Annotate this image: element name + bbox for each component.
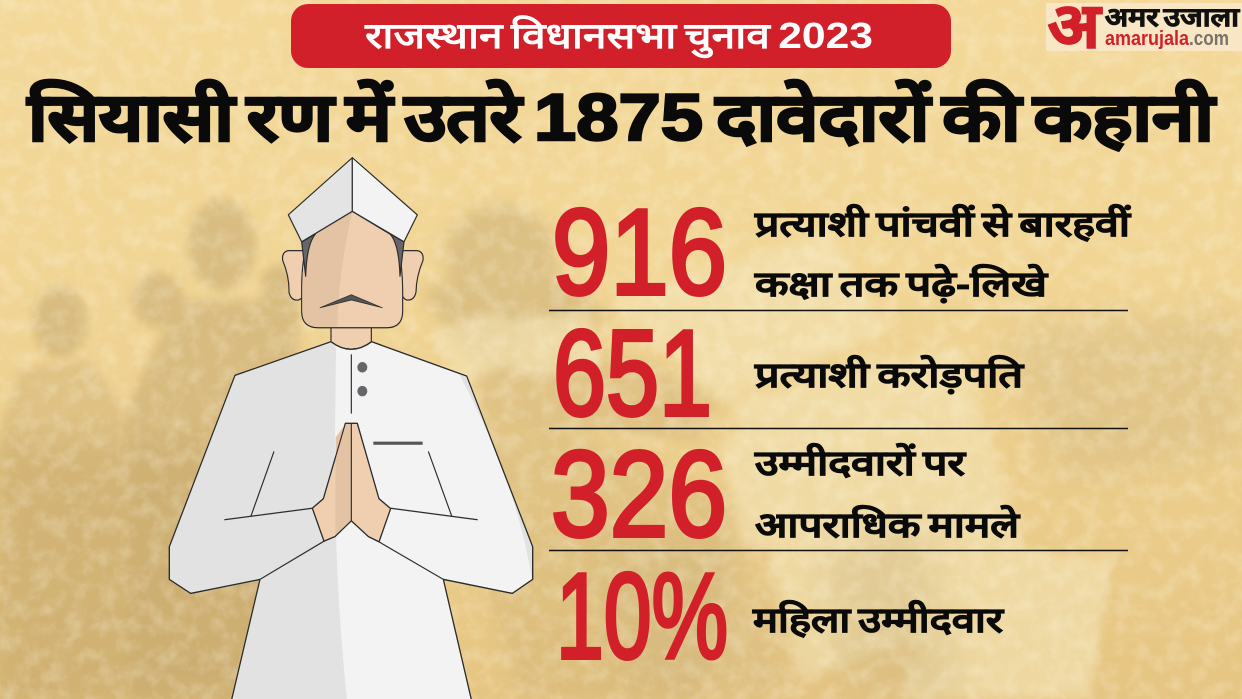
logo: Amar Ujala: amarujala: [1105, 28, 1190, 50]
illustration: politician in namaste pose: [169, 158, 533, 699]
hair: [302, 234, 404, 276]
hands: [312, 423, 391, 542]
ears: [283, 251, 423, 300]
crowd silhouettes, centre: [420, 205, 740, 699]
main heading: सियासी रण में उतरे 1875 दावेदारों की कहानी: [26, 79, 1217, 154]
stat: 10%: 10%: [556, 548, 728, 684]
stat: 10%: महिला उम्मीदवार: [752, 600, 1005, 640]
logo: Amar Ujala: .com: [1189, 28, 1229, 50]
crowd silhouettes, left: [0, 199, 300, 699]
stat: 326: 326: [551, 426, 727, 562]
stat: 10%: [556, 548, 1005, 684]
stat: 651: 651: [553, 305, 712, 441]
stat: 916: प्रत्याशी पांचवीं से बारहवीं: [754, 204, 1132, 244]
cap: [288, 158, 417, 242]
stat: 326: आपराधिक मामले: [755, 505, 1021, 545]
logo: Amar Ujala: अमर उजाला: [1105, 2, 1240, 32]
stat: 916: कक्षा तक पढ़े-लिखे: [754, 264, 1049, 304]
top red banner: राजस्थान विधानसभा चुनाव 2023: [364, 15, 873, 59]
stat: 916: 916: [552, 184, 727, 320]
kurta body: [169, 342, 533, 699]
stat: 651: [553, 305, 1024, 441]
neck: [331, 325, 371, 349]
face: [302, 211, 403, 328]
stat: 916: [552, 184, 1132, 320]
stat: 651: प्रत्याशी करोड़पति: [754, 355, 1024, 395]
top red banner: [291, 4, 951, 68]
held-up papers: [430, 230, 1110, 699]
stat: 326: [551, 426, 1021, 562]
logo: Amar Ujala: [1046, 0, 1242, 61]
stat: 326: उम्मीदवारों पर: [754, 443, 967, 483]
moustache: [320, 295, 382, 308]
